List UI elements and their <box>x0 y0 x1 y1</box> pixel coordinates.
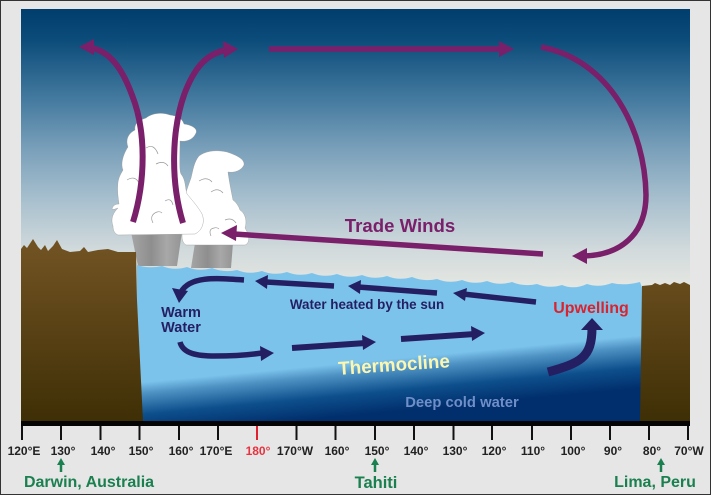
panel: ocean <box>137 265 690 421</box>
axis bar <box>21 421 690 426</box>
label: Warm Water <box>161 305 201 336</box>
arrow: sinking air <box>541 47 646 264</box>
axis labels: 90° <box>604 444 622 458</box>
axis labels: 120°E <box>8 444 40 458</box>
location: Lima, Peru <box>614 458 696 491</box>
axis labels: 140° <box>91 444 116 458</box>
arrow: rising air east <box>174 41 238 223</box>
axis labels: 150° <box>129 444 154 458</box>
cloud: small <box>182 151 249 245</box>
axis labels: 180° <box>246 444 271 458</box>
label: Water heated by the sun: Water heated by the sun <box>290 297 444 312</box>
arrow: return current 2 <box>292 335 376 350</box>
axis labels: 120° <box>482 444 507 458</box>
cloud: large <box>112 113 203 235</box>
land: left, Australia <box>21 239 143 421</box>
rain under clouds <box>131 232 233 268</box>
axis labels: 130° <box>51 444 76 458</box>
arrow: return current 3 <box>401 326 485 341</box>
axis labels: 140° <box>404 444 429 458</box>
arrow: surface current 1 <box>172 279 244 303</box>
arrow: upper air eastward <box>269 41 514 57</box>
location: Darwin, Australia <box>24 458 154 491</box>
axis labels <box>8 444 704 458</box>
label: Upwelling: Upwelling <box>553 300 629 317</box>
arrow: surface current 2 <box>255 275 334 289</box>
location: Tahiti <box>355 458 397 492</box>
location: Darwin, Australia: Darwin, Australia <box>24 474 154 491</box>
axis labels: 100° <box>561 444 586 458</box>
arrow: return current 1 <box>180 342 274 361</box>
label: Warm Water: Warm <box>161 305 201 321</box>
arrow: upwelling <box>548 318 603 372</box>
axis labels: 160° <box>325 444 350 458</box>
arrow: rising air west <box>79 39 143 222</box>
arrow: surface current 3 <box>348 280 437 294</box>
land: right, Peru <box>640 282 690 421</box>
axis labels: 80° <box>643 444 661 458</box>
label: Deep cold water: Deep cold water <box>405 395 519 411</box>
axis labels: 150° <box>365 444 390 458</box>
axis labels: 160° <box>169 444 194 458</box>
axis labels: 170°W <box>277 444 314 458</box>
axis labels: 170°E <box>200 444 232 458</box>
arrow: trade winds <box>221 225 543 254</box>
arrow: surface current 4 <box>453 288 536 302</box>
location: Tahiti: Tahiti <box>355 474 397 492</box>
label: Warm Water: Water <box>161 320 201 336</box>
location: Lima, Peru: Lima, Peru <box>614 474 696 491</box>
axis labels: 130° <box>443 444 468 458</box>
axis labels: 110° <box>521 444 545 458</box>
axis labels: 70°W <box>674 444 704 458</box>
panel: sky <box>21 9 690 294</box>
heading: Trade Winds: Trade Winds <box>345 215 455 236</box>
label: Thermocline: Thermocline <box>338 350 450 379</box>
axis ticks <box>22 426 688 440</box>
